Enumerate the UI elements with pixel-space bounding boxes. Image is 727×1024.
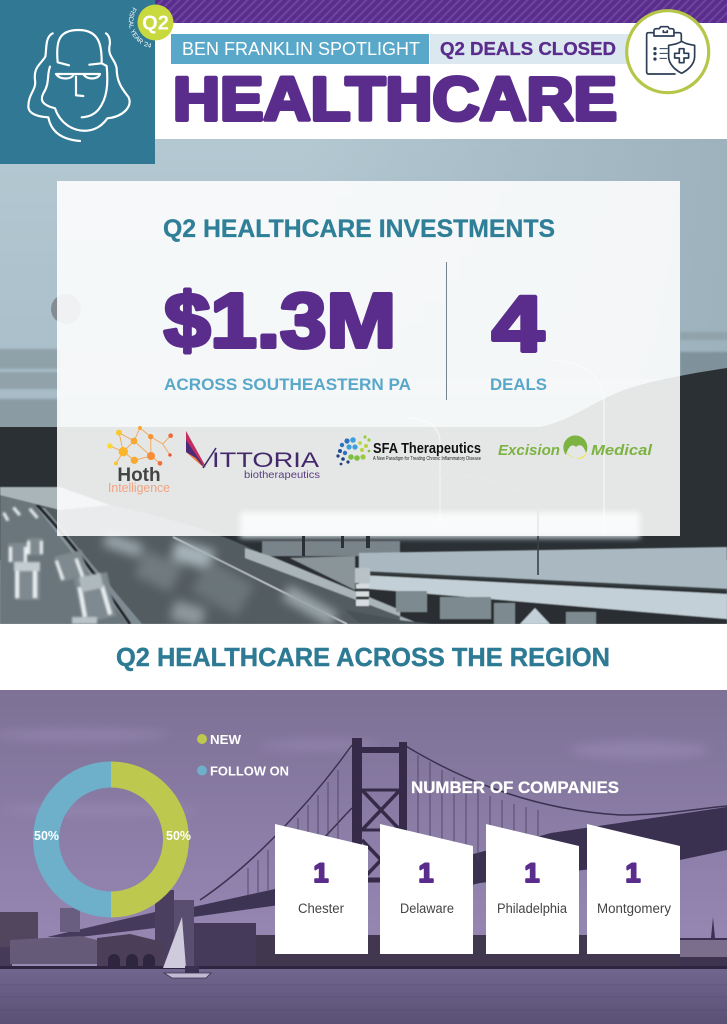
logo: Vittoria Biotherapeutics: ITTORIA [212, 449, 319, 472]
value: follow on share: 50% [34, 829, 59, 843]
card: Montgomery: Montgomery [597, 901, 671, 916]
background: bridge photo [0, 690, 727, 1024]
logo: SFA Therapeutics: A New Paradigm for Treating Chronic Inflammatory Disease [373, 456, 481, 462]
badge: Q2 [138, 4, 174, 40]
logo: Excision Medical: Excision [498, 442, 560, 459]
stat: deal count: 4 [492, 279, 544, 368]
icon: clipboard and shield in circle [627, 11, 709, 93]
card: Philadelphia: 1 [524, 858, 540, 888]
card: Chester [275, 824, 368, 954]
logo: Hoth Intelligence: Intelligence [108, 481, 170, 495]
card: Chester: Chester [298, 901, 344, 916]
card: Montgomery [587, 824, 680, 954]
fiscal year curved label: FISCAL YEAR '24 [128, 7, 152, 48]
banner: Ben Franklin Spotlight [171, 34, 429, 64]
card: Chester: 1 [313, 858, 329, 888]
badge: Q2: Q2 [142, 12, 169, 34]
blurred cars: far lanes [103, 532, 338, 628]
banner: Ben Franklin Spotlight: BEN FRANKLIN SPOTLIGHT [182, 38, 420, 59]
sailboat [163, 917, 211, 978]
header: purple striped bar [155, 0, 727, 23]
logo: SFA Therapeutics: SFA Therapeutics [373, 440, 481, 457]
logo: Excision Medical [498, 435, 653, 459]
title: Healthcare: HEALTHCARE [173, 65, 617, 133]
logo: Excision Medical: Medical [591, 442, 653, 459]
icon: Ben Franklin line portrait [28, 30, 130, 141]
card: Montgomery: 1 [625, 858, 641, 888]
card: Delaware: 1 [418, 858, 434, 888]
panel: Q2 healthcare investments [57, 181, 680, 536]
section heading: Q2 HEALTHCARE ACROSS THE REGION [116, 642, 610, 672]
header: teal logo square [0, 0, 155, 164]
blurred cars: near lanes [2, 507, 116, 624]
card: Delaware [380, 824, 473, 954]
banner: Q2 deals closed [430, 34, 630, 64]
section band: white [0, 624, 727, 690]
logo: Vittoria Biotherapeutics: biotherapeutics [244, 470, 320, 481]
logo: Hoth Intelligence [107, 426, 173, 495]
logo: Hoth Intelligence: Hoth [117, 465, 161, 486]
card: Delaware: Delaware [400, 901, 454, 916]
heading: number of companies: NUMBER OF COMPANIES [411, 778, 619, 797]
card: Philadelphia [486, 824, 579, 954]
value: new share: 50% [166, 829, 191, 843]
legend: FOLLOW ON [210, 764, 289, 778]
panel heading: Q2 HEALTHCARE INVESTMENTS [163, 215, 555, 243]
background: highway photo [0, 139, 727, 628]
logo: SFA Therapeutics [336, 435, 481, 465]
legend [197, 733, 289, 778]
card: Philadelphia: Philadelphia [497, 901, 567, 916]
logo: Vittoria Biotherapeutics [186, 431, 320, 481]
header: white band [155, 23, 727, 139]
chart: new vs follow on donut [33, 762, 191, 918]
banner: Q2 deals closed: Q2 DEALS CLOSED [440, 39, 616, 59]
stat label: deals: DEALS [490, 376, 547, 394]
stat label: region: ACROSS SOUTHEASTERN PA [164, 376, 411, 394]
legend: NEW [210, 733, 241, 747]
stat: investment amount: $1.3M [164, 278, 396, 364]
